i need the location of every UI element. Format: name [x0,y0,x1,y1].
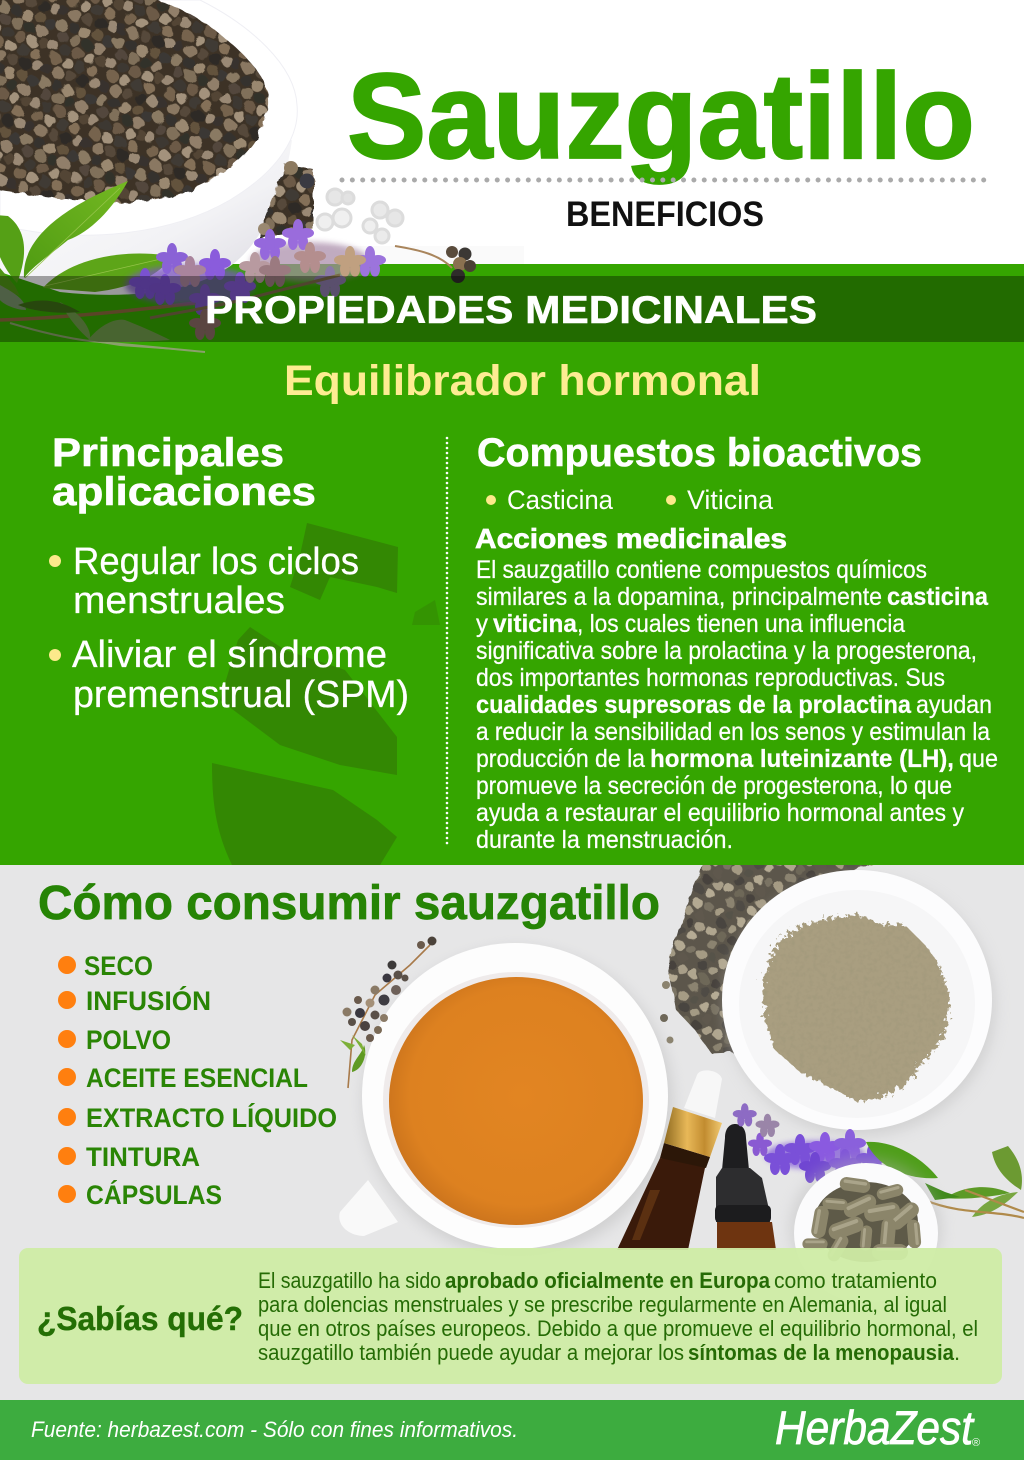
dark title band [0,276,1024,342]
medicinal actions text: y [476,610,488,638]
callout text: El sauzgatillo ha sido [258,1268,441,1293]
source note: Fuente: herbazest.com - Sólo con fines informativos. [31,1417,518,1442]
medicinal actions text [476,556,998,854]
list: consumption forms: POLVO [86,1025,171,1055]
illustration: bowl of seeds with leaves and flowers [0,0,524,352]
list: consumption forms [58,951,337,1210]
medicinal actions text: producción de la [476,745,645,773]
cup handle [339,1180,398,1236]
purple flowers [125,219,386,340]
right leaves [866,1142,1024,1218]
medicinal actions text: ayuda a restaurar el equilibrio hormonal antes y [476,799,964,827]
list: consumption forms: CÁPSULAS [86,1179,222,1210]
heading: main applications: Principales [52,431,284,475]
compounds list: Casticina [507,485,614,515]
cup of tea [339,943,673,1256]
dotted column divider [446,438,448,848]
branch with seeds [395,246,476,283]
medicinal actions text: cualidades supresoras de la prolactina [476,691,912,719]
application list: Aliviar el síndrome [72,634,387,676]
list: consumption forms: TINTURA [86,1142,200,1172]
callout text: que en otros países europeos. Debido a que promueve el equilibrio hormonal, el [258,1316,978,1341]
callout heading: ¿Sabías qué? [37,1300,243,1337]
logo: HerbaZest: ® [972,1437,980,1449]
application list [49,541,409,716]
application list: menstruales [73,580,285,622]
panel: bioactive compounds [475,431,998,854]
medicinal actions text: significativa sobre la prolactina y la progesterona, [476,637,977,665]
callout box: did you know [19,1248,1002,1384]
left sprig with seeds [340,936,436,1088]
callout text: sauzgatillo también puede ayudar a mejorar los [258,1340,684,1365]
heading: bioactive compounds: Compuestos bioactivos [477,431,922,475]
band heading: PROPIEDADES MEDICINALES [205,289,817,332]
header background [0,0,1024,264]
background silhouette: woman holding abdomen [212,523,440,865]
panel: main applications [49,431,409,716]
compounds list [486,485,774,515]
medicinal actions text: viticina [493,610,578,638]
bowl of capsules [790,1158,942,1303]
faded seeds [317,189,403,243]
plate of powder [722,870,995,1136]
section heading: how to consume: Cómo consumir sauzgatillo [38,877,660,930]
medicinal actions text: ayudan [916,691,992,719]
amber bottle [617,1158,706,1250]
dropper bulb and cap [722,1124,749,1170]
heading: main applications: aplicaciones [52,470,316,514]
medicinal actions text: , los cuales tienen una influencia [577,610,905,638]
tea [389,977,643,1225]
list: consumption forms: ACEITE ESENCIAL [86,1063,308,1093]
flowers near plate [733,1103,888,1183]
medicinal actions text: casticina [887,583,989,611]
callout text: síntomas de la menopausia [688,1340,955,1365]
seed pile [660,860,880,1054]
logo: HerbaZest: HerbaZest [775,1401,975,1454]
list: consumption forms: EXTRACTO LÍQUIDO [86,1102,337,1133]
medicinal actions text: El sauzgatillo contiene compuestos químicos [476,556,927,584]
application list: Regular los ciclos [73,541,359,583]
medicinal actions text: dos importantes hormonas reproductivas. Sus [476,664,945,692]
gray section background [0,865,1024,1400]
callout text: . [954,1340,960,1365]
list: consumption forms: SECO [84,951,153,981]
list: consumption forms: INFUSIÓN [86,985,211,1016]
medicinal actions text: durante la menstruación. [476,826,733,854]
medicinal actions text: que [959,745,998,773]
callout text: para dolencias menstruales y se prescribe regularmente en Alemania, al igual [258,1292,947,1317]
callout text [258,1268,978,1365]
footer bar [0,1400,1024,1460]
heading: main applications [52,431,316,514]
scattered seeds [258,161,314,238]
green section background [0,264,1024,865]
leaf tip over band [88,341,205,352]
medicinal actions text: promueve la secreción de progesterona, lo que [476,772,952,800]
callout text: aprobado oficialmente en Europa [445,1268,771,1293]
compounds list: Viticina [687,485,774,515]
heading: medicinal actions: Acciones medicinales [475,523,787,554]
leaves [0,181,205,352]
dropper bottles [617,1070,776,1250]
section heading: hormonal balance: Equilibrador hormonal [284,357,761,405]
medicinal actions text: hormona luteinizante (LH), [650,745,954,773]
medicinal actions text: similares a la dopamina, principalmente [476,583,882,611]
callout text: como tratamiento [774,1268,937,1293]
title: Sauzgatillo [347,48,975,184]
subtitle: BENEFICIOS [566,195,764,234]
dotted title divider [342,178,987,182]
application list: premenstrual (SPM) [73,674,409,716]
